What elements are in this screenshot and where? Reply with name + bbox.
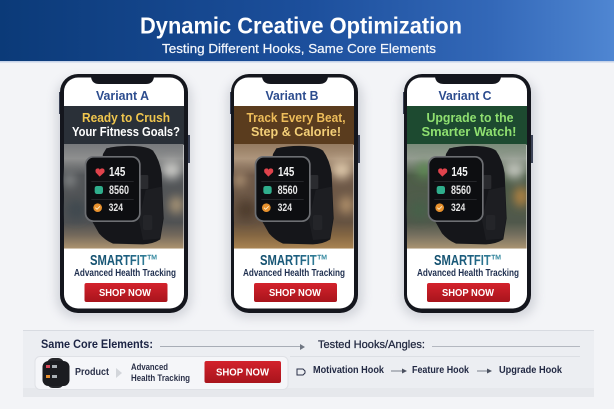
headline band: Track Every Beat, — [246, 110, 346, 125]
hook: motivation: Motivation Hook — [313, 365, 384, 376]
heading: same core elements: Same Core Elements: — [41, 339, 153, 351]
brand: SMARTFIT™ — [434, 252, 502, 269]
headline band — [407, 106, 527, 145]
icon: connector — [297, 369, 305, 375]
tagline: Advanced Health Tracking — [243, 267, 345, 279]
icon: watch — [42, 358, 70, 388]
shop now button: SHOP NOW — [269, 288, 322, 299]
headline band: Ready to Crush — [82, 110, 170, 125]
product photo: smartwatch: 324 — [109, 202, 124, 214]
headline band: Step & Calorie! — [251, 124, 341, 139]
arrow — [391, 368, 407, 374]
variant label: Variant C — [438, 89, 492, 103]
label: advanced health tracking — [131, 362, 190, 384]
arrow — [477, 368, 492, 374]
shop now button: SHOP NOW — [99, 288, 152, 299]
headline band — [64, 106, 184, 145]
label: product: Product — [75, 367, 110, 378]
product photo: smartwatch: 8560 — [278, 183, 298, 197]
label: advanced health tracking: Advanced — [131, 362, 168, 373]
label: advanced health tracking: Health Tracking — [131, 373, 190, 384]
header banner — [0, 0, 614, 62]
product photo: smartwatch: 145 — [109, 165, 125, 179]
product photo: smartwatch: 8560 — [109, 183, 129, 197]
panel: summary strip — [23, 330, 594, 397]
product photo: smartwatch: 145 — [278, 165, 294, 179]
shop now button — [204, 361, 281, 383]
product photo: smartwatch — [64, 144, 184, 249]
headline band: Smarter Watch! — [422, 124, 516, 139]
product photo: smartwatch: 324 — [278, 202, 293, 214]
headline band — [234, 106, 354, 145]
title: Dynamic Creative Optimization — [140, 12, 462, 38]
shop now button: SHOP NOW — [442, 288, 495, 299]
arrow — [116, 368, 122, 378]
phone: variant B — [227, 74, 363, 318]
phone: variant C — [400, 74, 536, 318]
subtitle: Testing Different Hooks, Same Core Elements — [162, 42, 436, 56]
hook: feature: Feature Hook — [412, 365, 469, 376]
shop now button — [427, 283, 510, 302]
product photo: smartwatch: 145 — [451, 165, 468, 179]
brand: SMARTFIT™ — [90, 252, 158, 269]
headline band: Upgrade to the — [426, 110, 514, 125]
tagline: Advanced Health Tracking — [417, 267, 519, 279]
phone: variant A — [56, 74, 192, 318]
arrow — [300, 344, 305, 350]
shop now button: SHOP NOW — [216, 368, 270, 378]
product photo: smartwatch — [234, 144, 354, 249]
variant label: Variant B — [266, 89, 318, 103]
tagline: Advanced Health Tracking — [74, 267, 176, 279]
shop now button — [84, 283, 168, 302]
product photo: smartwatch: 8560 — [451, 183, 471, 197]
variant label: Variant A — [96, 89, 149, 103]
product photo: smartwatch — [407, 144, 528, 249]
hook: upgrade: Upgrade Hook — [499, 365, 562, 376]
panel: core elements row — [35, 356, 288, 390]
shop now button — [254, 283, 337, 302]
product photo: smartwatch: 324 — [451, 202, 466, 214]
brand: SMARTFIT™ — [260, 252, 328, 269]
headline band: Your Fitness Goals? — [72, 124, 180, 139]
heading: tested hooks: Tested Hooks/Angles: — [318, 339, 425, 351]
